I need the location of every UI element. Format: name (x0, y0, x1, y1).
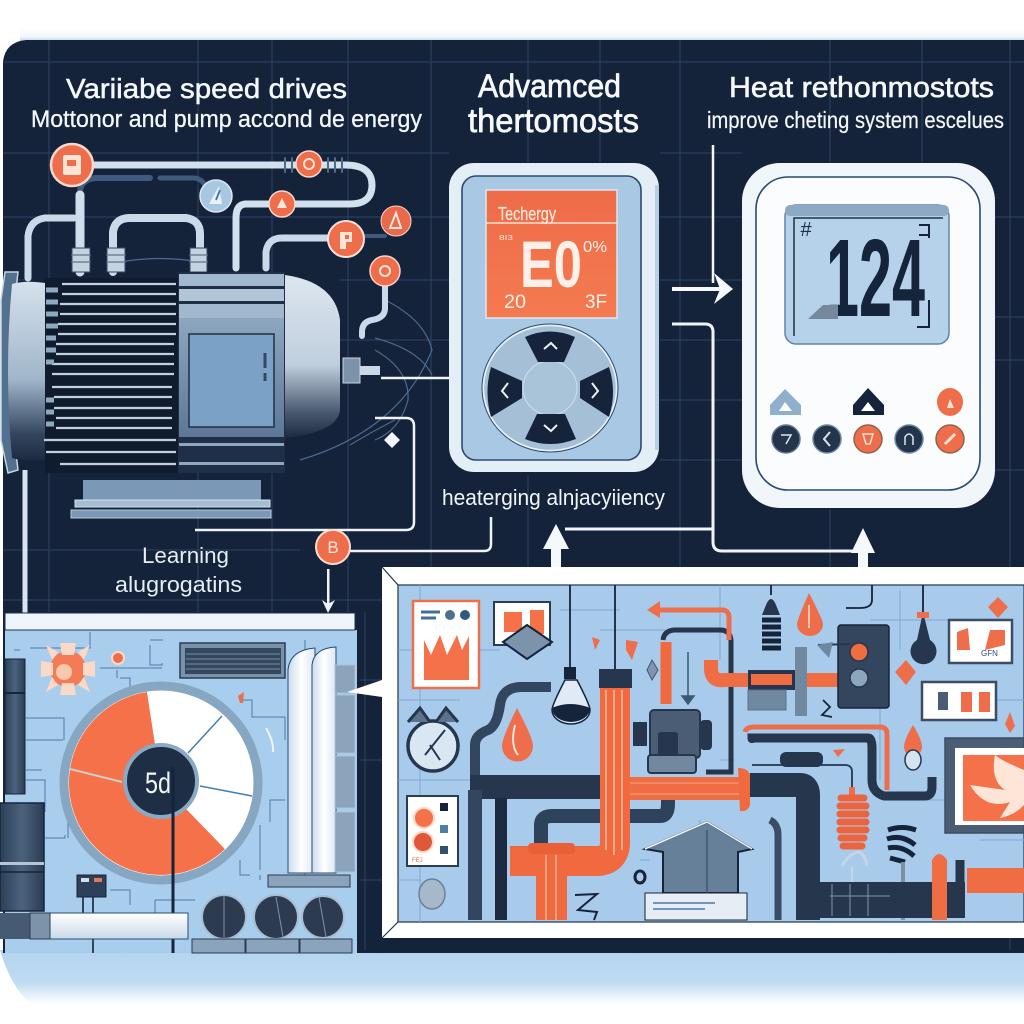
icon: down arrow (682, 652, 694, 704)
centre housing (178, 272, 285, 473)
base blocks (192, 939, 352, 953)
icon: hanging bulb (552, 667, 590, 724)
device face (462, 176, 641, 460)
orange display (486, 190, 617, 318)
icon: left drop (502, 708, 533, 762)
white frame (382, 567, 1024, 938)
bottom light band (0, 950, 1024, 1004)
motor base (71, 480, 271, 518)
icon: zig-zag lower (575, 894, 597, 920)
orange loop pipe (745, 727, 887, 790)
central pump (633, 710, 712, 773)
LCD display (785, 205, 949, 344)
orange display: 8I3 (499, 235, 513, 242)
icon: flame (937, 388, 963, 416)
clock gauge (408, 708, 458, 771)
connector: efficiency label to badge (345, 517, 491, 551)
arrow: up into left thermostat (543, 524, 712, 567)
dark pipe network (470, 630, 932, 920)
framed picture top right: GFN (981, 649, 998, 658)
orange display: 3F (585, 292, 607, 313)
wall vent (180, 643, 285, 678)
sensor badge 5 (328, 221, 364, 257)
connector: lower thermostat link (672, 324, 862, 551)
small marks (592, 637, 658, 680)
arrow: thermostat to thermostat (672, 145, 733, 304)
orange display: Techergy (498, 204, 556, 224)
sensor badge 3 (200, 180, 232, 212)
label: heating efficiency: heaterging alnjacyiiency (442, 485, 665, 510)
badge: B: B (327, 538, 339, 557)
bottom orange pipe (932, 854, 1024, 920)
frame mitre corners (382, 567, 398, 938)
dark manifold (820, 860, 965, 918)
boiler room panel (0, 613, 357, 953)
sensor badge 1 (51, 144, 93, 186)
big orange pipe (510, 669, 632, 861)
LCD display: 124 (826, 217, 925, 340)
percentage wheel chart (64, 686, 258, 880)
cooling fins (44, 278, 178, 473)
sensor badge 2 (296, 151, 322, 177)
heading: heat thermostats (707, 72, 1004, 133)
wall brick lines (14, 632, 305, 925)
orange coil (840, 787, 866, 885)
label: learning algorithms: Learning (142, 543, 229, 568)
orange arrow line (647, 601, 729, 640)
arrow: up into right thermostat (851, 528, 875, 567)
small house (645, 822, 752, 920)
icon: diamond node (384, 432, 400, 448)
heading: variable speed drives (31, 73, 422, 133)
curved accent (266, 728, 273, 752)
radiator and pipework panel (347, 567, 1024, 938)
navigation dial (482, 324, 618, 452)
heading: advanced thermostats: thertomosts (468, 102, 639, 139)
orange vertical stub (528, 843, 575, 920)
wall tile lines (398, 585, 1024, 922)
wall (5, 630, 357, 953)
icon: zig-zag (822, 700, 832, 717)
poster: flames (413, 601, 479, 688)
rear ring (1, 272, 18, 473)
sensor badge 7 (370, 256, 400, 286)
heading: advanced thermostats (468, 68, 639, 139)
orange hooked pipe (711, 647, 838, 716)
label: learning algorithms: alugrogatins (115, 572, 242, 597)
orange riser (660, 642, 672, 704)
insulated columns (268, 647, 350, 887)
framed bars (922, 682, 996, 720)
icon: small ring (635, 871, 645, 883)
rear bell (8, 282, 45, 461)
centre value: 5d (145, 767, 171, 800)
icon: house outline dark (853, 388, 884, 415)
connector: motor to thermostat (381, 377, 449, 379)
inner wall (398, 585, 1024, 922)
icon: orange marker (238, 692, 244, 703)
poster: gauge with diamond (494, 602, 552, 659)
front dome (285, 275, 340, 438)
control box (77, 875, 106, 953)
sensor badge 6 (381, 206, 411, 236)
subheading: variable speed drives: Mottonor and pump accond de energy (31, 106, 422, 133)
brush heater (752, 752, 852, 787)
hanging spring (762, 599, 781, 648)
wires (570, 585, 923, 669)
icon: small gear (112, 652, 124, 664)
top halftone edge (20, 28, 1024, 42)
pointer from boiler panel (347, 680, 382, 697)
black coil (887, 828, 916, 920)
connector: motor down to boiler wall (22, 470, 28, 614)
grey wall blocks (335, 665, 355, 872)
sensor badge 4 (269, 191, 295, 217)
motor body (1, 272, 380, 518)
advanced thermostat device (449, 163, 659, 472)
boiler tank (0, 803, 44, 939)
output shaft (343, 358, 380, 383)
icon: leaf badge (419, 879, 445, 909)
heading: heat thermostats: Heat rethonmostots (729, 72, 994, 104)
centre hub (125, 745, 197, 817)
valve wheels (202, 895, 344, 939)
icon: pointer wedge (817, 642, 833, 658)
control buttons (772, 425, 964, 453)
LCD display: # (800, 219, 812, 241)
badge: B (316, 530, 350, 564)
info card (407, 796, 458, 866)
access panel (189, 334, 274, 427)
arrow: badge down to boiler (322, 569, 335, 613)
flue pipe (5, 659, 25, 794)
wall switch (818, 625, 889, 708)
icon: right bulb (911, 612, 937, 664)
orange display: E0 (520, 227, 582, 301)
orange star marks (895, 597, 1015, 733)
icon: house outline light (770, 389, 801, 415)
orange display: 20 (504, 292, 526, 313)
connector: control line to learning badge (195, 418, 414, 530)
label: learning algorithms (115, 543, 242, 597)
icon: top drop (797, 593, 823, 636)
info card: FEJ (412, 858, 423, 864)
motor piping and sensors (28, 158, 385, 336)
top ledge (5, 613, 355, 630)
orange display: 0% (583, 239, 607, 256)
framed picture top right (949, 620, 1012, 663)
icon: orange gear (41, 643, 95, 695)
framed leaf picture (945, 738, 1024, 833)
motion arcs around motor (120, 258, 432, 460)
house base (645, 893, 747, 920)
heading: variable speed drives: Variiabe speed drives (66, 73, 347, 104)
small orange mark (833, 749, 845, 757)
horizontal white pipe (30, 913, 188, 939)
icon: pendant drop (904, 725, 922, 770)
thermometer rod (172, 767, 174, 953)
orange horizontal pipe (630, 768, 750, 811)
heat thermostat device (742, 163, 995, 508)
heading: advanced thermostats: Advamced (478, 68, 621, 104)
